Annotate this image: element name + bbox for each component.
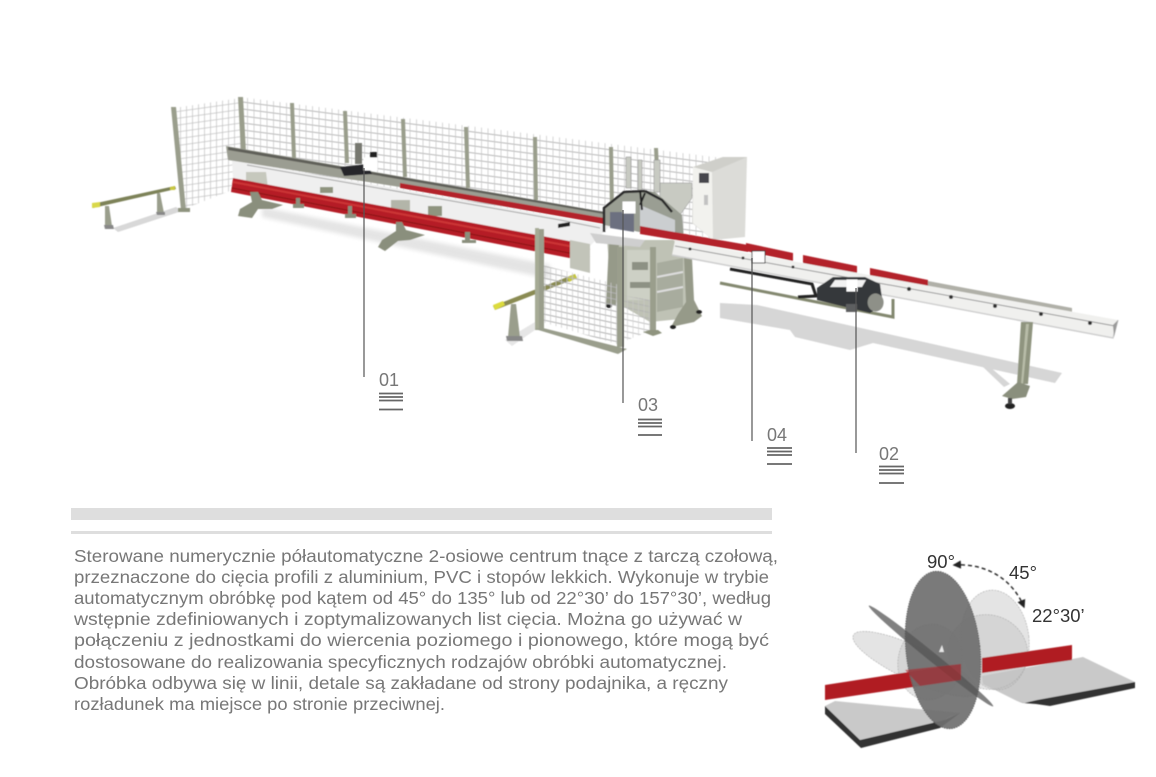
callout label 03	[638, 395, 662, 435]
safety fence	[171, 97, 722, 240]
machine illustration	[92, 97, 1118, 409]
angle label 45 degrees: 45°	[1009, 562, 1037, 583]
description text: połączeniu z jednostkami do wiercenia poziomego i pionowego, które mogą być	[74, 630, 769, 650]
saw motors and cylinders	[626, 157, 692, 215]
left plate	[825, 701, 960, 748]
description text: dostosowane do realizowania specyficznych rodzajów obróbki automatycznej.	[74, 652, 727, 672]
front red rail	[231, 178, 590, 262]
main blade at 90 degrees	[898, 568, 988, 732]
saw hood	[604, 190, 684, 240]
left roller bench	[92, 186, 176, 229]
callout label 02: 02	[879, 444, 899, 464]
ghost blade positions	[846, 587, 1038, 708]
control cabinet	[692, 157, 747, 240]
leader line 03	[622, 210, 624, 403]
description text: przeznaczone do cięcia profili z aluminium, PVC i stopów lekkich. Wykonuje w trybie	[74, 567, 769, 587]
red fence right	[982, 645, 1072, 673]
divider bar	[71, 531, 772, 534]
cutting angle diagram	[825, 565, 1135, 748]
callout label 02	[879, 444, 904, 483]
red fence left	[825, 664, 961, 700]
description text: rozładunek ma miejsce po stronie przeciwnej.	[74, 694, 445, 714]
blade arbor	[939, 645, 944, 652]
angle arrow	[954, 565, 1024, 607]
measuring carriage	[340, 143, 377, 176]
description text	[73, 546, 778, 714]
angle label 22 degrees 30 minutes: 22°30’	[1032, 605, 1085, 626]
rail support feet	[238, 192, 476, 251]
blade at 45 degrees	[866, 602, 996, 710]
description text: Sterowane numerycznie półautomatyczne 2-osiowe centrum tnące z tarczą czołową,	[74, 546, 778, 566]
leader line 02	[855, 288, 857, 453]
callout label 04	[767, 425, 792, 464]
right plate	[982, 657, 1135, 706]
description text: wstępnie zdefiniowanych i zoptymalizowanych list cięcia. Można go używać w	[73, 609, 742, 629]
saw base	[570, 233, 702, 329]
callout label 04: 04	[767, 425, 787, 445]
angle label 90 degrees: 90°	[927, 551, 955, 572]
description text: Obróbka odbywa się w linii, detale są zakładane od strony podajnika, a ręczny	[74, 673, 728, 693]
leader line 04	[751, 258, 753, 441]
callout label 03: 03	[638, 395, 658, 415]
callout label 01	[379, 370, 403, 410]
right support leg	[1002, 322, 1033, 409]
yellow infeed bar	[493, 274, 577, 341]
floor shadows	[113, 207, 1062, 387]
red fence overlay	[905, 664, 961, 686]
callout label 01: 01	[379, 370, 399, 390]
heading bar	[71, 508, 772, 520]
leader line 01	[363, 168, 365, 377]
callout marker squares	[364, 158, 857, 291]
rear beam and bed	[226, 146, 610, 246]
chain guide, motor and rail	[720, 269, 893, 317]
right bed and red stock	[640, 226, 1118, 338]
front safety gate	[535, 228, 662, 354]
description text: automatycznym obróbkę pod kątem od 45° do 135° lub od 22°30’ do 157°30’, według	[74, 588, 771, 608]
